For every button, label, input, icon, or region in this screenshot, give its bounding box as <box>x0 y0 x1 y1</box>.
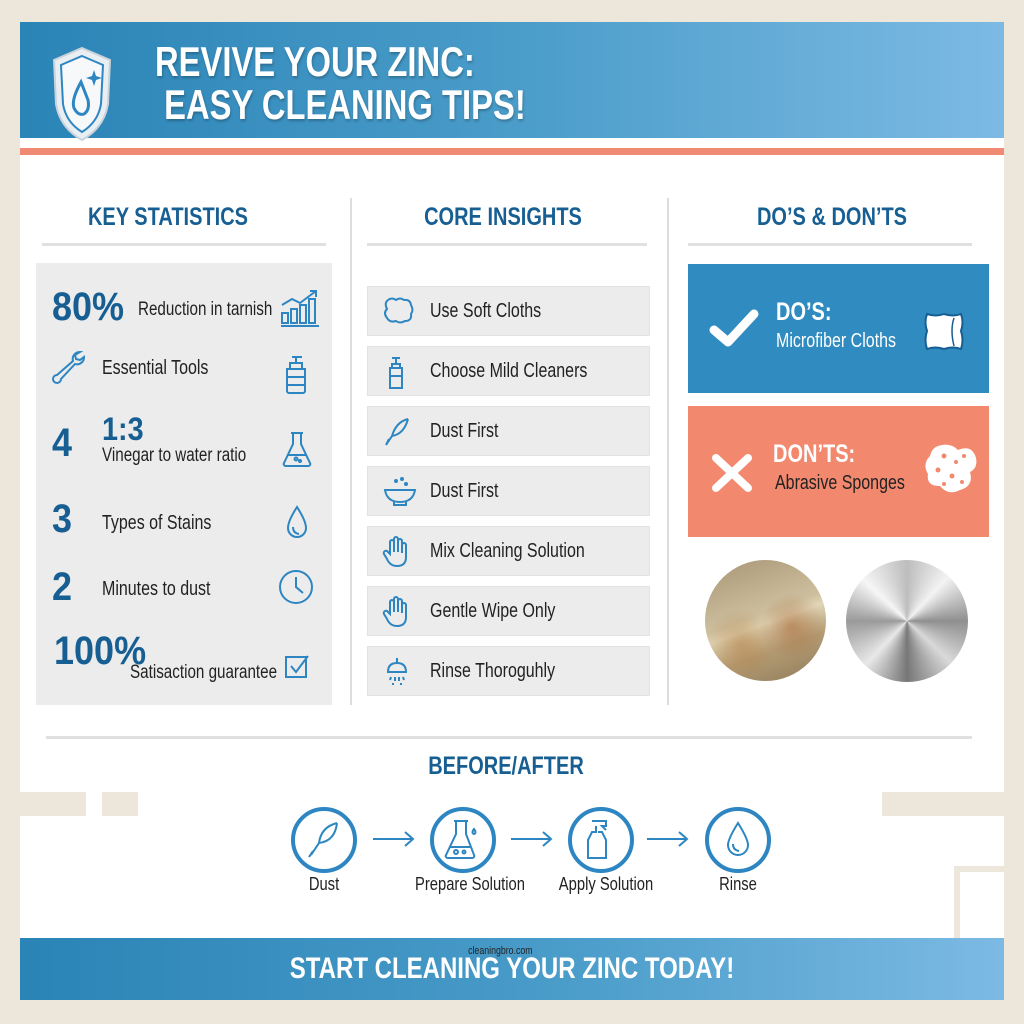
stat essential tools <box>52 351 85 384</box>
panel: key statistics: Types of Stains <box>102 512 211 534</box>
title: EASY CLEANING TIPS! <box>164 81 526 128</box>
panel: key statistics: Satisaction guarantee <box>130 662 277 683</box>
insight 4 <box>367 466 650 516</box>
insight 4: Dust First <box>430 480 498 502</box>
process flow: Apply Solution <box>559 874 653 894</box>
panel: key statistics: Reduction in tarnish <box>138 299 272 320</box>
panel: donts: Abrasive Sponges <box>775 472 905 494</box>
insight 6 <box>367 586 650 636</box>
panel: donts <box>688 406 989 537</box>
image: clean zinc <box>846 560 968 682</box>
stat 100%: 100% <box>54 629 146 673</box>
panel: dos <box>688 264 989 393</box>
panel: key statistics <box>36 263 332 705</box>
watermark: cleaningbro.com <box>468 945 533 957</box>
column dividers <box>350 198 352 705</box>
stat 1:3 ratio: 4 <box>52 421 72 465</box>
header banner <box>20 22 1004 138</box>
panel: key statistics: 1:3 <box>102 411 144 447</box>
insight 1 <box>367 286 650 336</box>
process flow: Rinse <box>719 874 757 894</box>
insight 7: Rinse Thoroguhly <box>430 660 555 682</box>
insight 3: Dust First <box>430 420 498 442</box>
icon: check <box>710 310 758 346</box>
panel: donts: DON’TS: <box>773 440 855 468</box>
arrow <box>511 831 552 847</box>
footer banner <box>20 938 1004 1000</box>
panel: core insights <box>367 286 650 696</box>
panel: dos: DO’S: <box>776 298 832 326</box>
arrow <box>373 831 414 847</box>
stat 2 minutes: 2 <box>52 565 72 609</box>
step: dust <box>291 807 357 873</box>
process flow: Dust <box>309 874 339 894</box>
image: tarnished zinc <box>705 560 826 681</box>
icon: cloth <box>924 312 964 350</box>
step: prepare solution <box>430 807 496 873</box>
icon: x <box>712 454 752 492</box>
insight 2: Choose Mild Cleaners <box>430 360 587 382</box>
heading: core insights: CORE INSIGHTS <box>424 203 582 231</box>
step: rinse <box>705 807 771 873</box>
heading: before/after: BEFORE/AFTER <box>428 752 584 780</box>
title: REVIVE YOUR ZINC: <box>155 38 475 85</box>
side notches <box>20 792 86 816</box>
process flow <box>291 807 771 894</box>
insight 1: Use Soft Cloths <box>430 300 541 322</box>
call to action: START CLEANING YOUR ZINC TODAY! <box>290 952 734 985</box>
insight 5 <box>367 526 650 576</box>
divider <box>46 736 972 739</box>
insight 7 <box>367 646 650 696</box>
insight 6: Gentle Wipe Only <box>430 600 555 622</box>
panel: key statistics: Essential Tools <box>102 357 208 379</box>
icon: sponge <box>925 444 976 492</box>
step: apply solution <box>568 807 634 873</box>
heading: key statistics: KEY STATISTICS <box>88 203 248 231</box>
stat 3 stains: 3 <box>52 497 72 541</box>
salmon stripe <box>20 148 1004 155</box>
panel: key statistics: Vinegar to water ratio <box>102 445 246 466</box>
process flow: Prepare Solution <box>415 874 525 894</box>
stat 80%: 80% <box>52 285 124 329</box>
icon: shield with drop <box>53 46 111 141</box>
title <box>155 38 526 128</box>
insight 5: Mix Cleaning Solution <box>430 540 585 562</box>
arrow <box>647 831 688 847</box>
insight 3 <box>367 406 650 456</box>
panel: key statistics: Minutes to dust <box>102 578 210 600</box>
panel: dos: Microfiber Cloths <box>776 330 896 352</box>
insight 2 <box>367 346 650 396</box>
heading: dos and donts: DO’S & DON’TS <box>757 203 907 231</box>
